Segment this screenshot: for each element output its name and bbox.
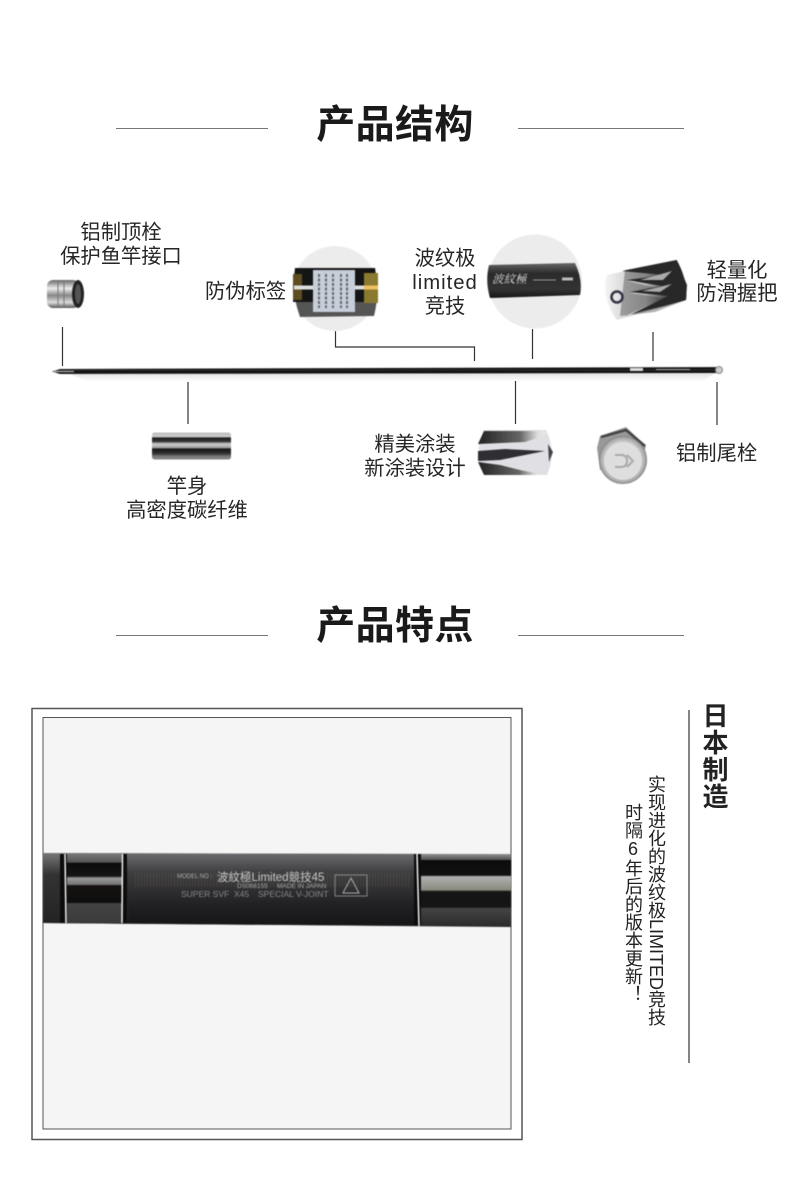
icon: rod body segment [152, 432, 231, 460]
divider lines beside headings [116, 128, 684, 636]
label: light grip [696, 260, 778, 305]
label: Bowenji limited: 波纹极 [415, 248, 475, 270]
label: Bowenji limited [412, 248, 478, 318]
rod close-up: SUPER SVF [181, 889, 229, 899]
label: light grip: 轻量化 [707, 260, 767, 282]
label: rod body [126, 476, 248, 522]
connector lines [62, 327, 717, 425]
icon: anti-counterfeit label close-up [292, 246, 378, 331]
icon: aluminium tip plug [47, 280, 84, 308]
label: paint [364, 434, 466, 480]
label: paint: 新涂装设计 [364, 458, 466, 480]
rod close-up: 波紋極Limited競技45 [217, 870, 324, 884]
vertical text: second line: 时隔 6 年后的版本更新！ [623, 803, 643, 1003]
label: end plug: 铝制尾栓 [676, 443, 757, 465]
vertical divider [688, 710, 690, 1063]
label: aluminium tip plug [60, 222, 182, 268]
label: Bowenji limited: 竞技 [425, 296, 465, 318]
label: anti-counterfeit: 防伪标签 [205, 281, 286, 303]
rod close-up: MADE IN JAPAN [277, 883, 327, 890]
rod close-up: X45 [234, 889, 249, 899]
label: rod body: 高密度碳纤维 [126, 500, 248, 522]
icon: light non-slip grip [605, 260, 687, 320]
icon: Bowenji limited close-up [487, 234, 582, 328]
rod close-up [43, 853, 511, 927]
icon: aluminium end plug [597, 427, 646, 484]
icon: exquisite paint segment [478, 430, 553, 475]
heading: product features: 产品特点 [316, 605, 474, 648]
label: rod body: 竿身 [167, 476, 207, 498]
heading: product structure: 产品结构 [316, 104, 474, 147]
rod [52, 366, 722, 382]
rod close-up: DS068155 [237, 883, 268, 890]
label: Bowenji limited: limited [412, 272, 478, 294]
label: paint: 精美涂装 [374, 434, 456, 456]
icon: Bowenji limited close-up: 波紋極 [492, 271, 528, 287]
vertical title: made in Japan: 日本制造 [699, 702, 729, 810]
rod close-up: MODEL NO : [177, 874, 212, 880]
label: light grip: 防滑握把 [696, 283, 778, 305]
label: aluminium tip plug: 保护鱼竿接口 [60, 246, 182, 268]
label: aluminium tip plug: 铝制顶栓 [80, 222, 162, 244]
panel: feature image frame with rod [32, 708, 522, 1140]
vertical text: first line: 实现进化的波纹极LIMITED竞技 [646, 775, 666, 1026]
rod close-up: SPECIAL V-JOINT [258, 889, 329, 899]
